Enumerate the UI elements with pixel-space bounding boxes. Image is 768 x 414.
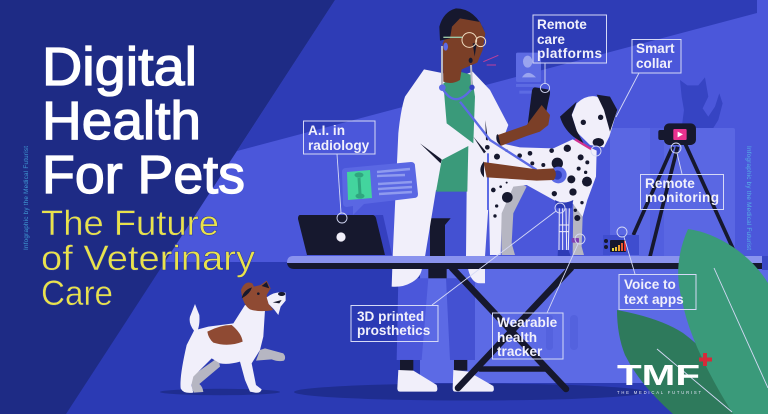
callout: smart collar: Smart	[636, 41, 675, 56]
back cabinet	[546, 128, 735, 350]
laptop	[298, 215, 392, 255]
subtitle: of Veterinary	[41, 239, 256, 278]
examination table	[287, 256, 768, 389]
callout: smart collar	[591, 40, 681, 156]
callout: 3D printed prosthetics	[351, 203, 565, 342]
callout: remote monitoring	[640, 143, 724, 210]
title	[42, 37, 245, 205]
subtitle: Care	[41, 274, 113, 313]
callout: remote care platforms: platforms	[537, 46, 602, 61]
callout: A.I. in radiology: radiology	[308, 138, 370, 153]
stethoscope	[442, 46, 537, 210]
callout: 3D printed prosthetics: prosthetics	[357, 323, 430, 338]
green shirt	[436, 72, 475, 192]
speech lines	[483, 55, 498, 65]
left credit: Infographic by the Medical Futurist	[23, 146, 30, 250]
head of dog	[560, 95, 617, 149]
callout: wearable health tracker: tracker	[497, 344, 543, 359]
callout: voice to text apps: text apps	[624, 292, 684, 307]
dalmatian dog	[485, 95, 617, 256]
trousers	[397, 190, 494, 392]
logo: The Medical Futurist	[617, 353, 712, 395]
callout: remote care platforms	[533, 15, 606, 93]
chest piece	[550, 167, 567, 183]
icon: cat silhouette on cabinet	[680, 77, 723, 128]
callout: remote care platforms: Remote	[537, 17, 587, 32]
callout: wearable health tracker: health	[497, 330, 537, 345]
callout: 3D printed prosthetics: 3D printed	[357, 309, 424, 324]
prosthetic leg	[555, 200, 573, 256]
callout: wearable health tracker	[492, 234, 585, 359]
camera on tripod	[633, 123, 737, 257]
remote care profile card	[516, 53, 541, 94]
title: Health	[42, 91, 201, 151]
logo: The Medical Futurist: TMF	[617, 360, 700, 392]
callout: remote care platforms: care	[537, 32, 565, 47]
body	[486, 139, 597, 255]
device with signal bars	[603, 235, 639, 255]
title: Digital	[42, 37, 197, 97]
wearable tracker	[572, 238, 579, 243]
callout: smart collar: collar	[636, 56, 673, 71]
exam arm	[483, 162, 556, 181]
head	[439, 8, 486, 83]
callout: A.I. in radiology: A.I. in	[308, 123, 345, 138]
subtitle	[41, 204, 256, 313]
speech card with bone x-ray	[342, 162, 418, 215]
callout: A.I. in radiology	[304, 121, 375, 223]
right credit: Infographic by the Medical Futurist	[745, 146, 752, 250]
foreground leaves	[617, 229, 768, 414]
callout: voice to text apps: Voice to	[624, 277, 676, 292]
spots	[485, 145, 592, 221]
phone	[528, 87, 550, 126]
callout: voice to text apps	[617, 227, 696, 310]
floor shadows	[160, 384, 646, 400]
lab coat	[392, 69, 508, 287]
subtitle: The Future	[41, 204, 219, 243]
callout: wearable health tracker: Wearable	[497, 315, 558, 330]
vet arms, phone and stethoscope	[439, 43, 567, 210]
callout: remote monitoring: monitoring	[645, 190, 719, 205]
phone arm	[498, 105, 550, 146]
small terrier dog	[180, 281, 286, 393]
callout: remote monitoring: Remote	[645, 176, 695, 191]
title: For Pets	[42, 145, 245, 205]
veterinarian	[392, 8, 508, 392]
logo: The Medical Futurist: THE MEDICAL FUTURIST	[617, 390, 701, 395]
far legs	[501, 182, 584, 255]
